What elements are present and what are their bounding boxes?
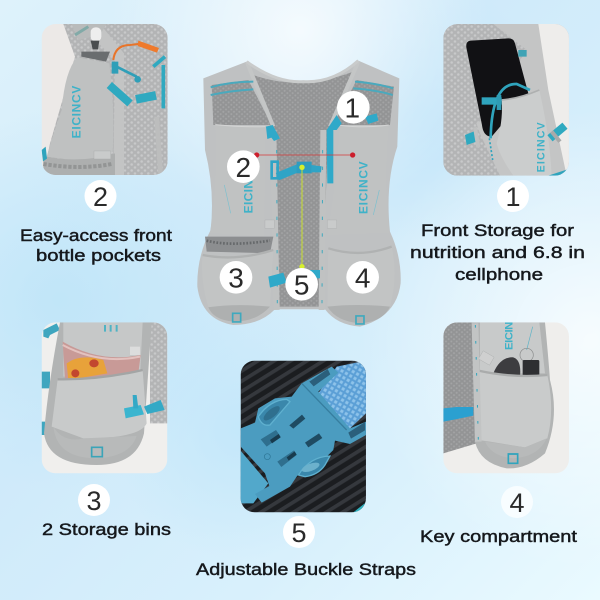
caption: front storage (410, 221, 585, 284)
panel: buckle close-up photo (240, 361, 366, 512)
vest marker 3 (220, 261, 252, 294)
number badge 5: 5 (291, 518, 307, 548)
panel: front storage phone photo: EICINCV (536, 121, 548, 172)
vest marker 3: 3 (228, 263, 244, 294)
buckle (241, 367, 366, 503)
trim columns (273, 130, 323, 310)
caption: 2 storage bins: 2 Storage bins (42, 520, 171, 539)
vest marker 4 (346, 261, 379, 294)
caption: front storage: cellphone (455, 265, 543, 284)
number badge 4: 4 (509, 488, 525, 518)
number badge 1 (497, 180, 529, 212)
main vest diagram (197, 61, 401, 327)
caption: adjustable buckle straps: Adjustable Buckle Straps (196, 560, 416, 579)
bottom left pocket (205, 237, 273, 253)
phone (466, 38, 528, 137)
caption: front storage: Front Storage for (421, 221, 574, 240)
caption: key compartment: Key compartment (420, 527, 577, 546)
panel: storage bins photo (42, 322, 167, 473)
logo text: EICINCV (70, 86, 84, 138)
vest logo right: EICINCV (356, 161, 370, 214)
number badge 4 (501, 486, 533, 518)
panel: front storage phone photo (443, 24, 570, 176)
vest marker 2 (227, 150, 260, 183)
vest logo left: EICIN (242, 180, 256, 213)
vest marker 5 (285, 268, 318, 301)
panel: easy-access bottle pocket photo (42, 24, 168, 175)
number badge 1: 1 (505, 182, 521, 212)
callout: red leader line 2 (254, 152, 355, 158)
caption: easy-access front bottle pockets: bottle pockets (36, 246, 161, 265)
vest marker 2: 2 (236, 152, 251, 183)
number badge 5 (283, 516, 315, 548)
number badge 2: 2 (93, 182, 108, 212)
vest marker 4: 4 (355, 263, 370, 294)
number badge 3: 3 (86, 486, 102, 516)
callout: yellow leader line 5 (299, 165, 305, 269)
number badge 3 (78, 484, 110, 516)
caption: easy-access front bottle pockets: Easy-access front (20, 226, 172, 245)
front bottle pockets (210, 125, 265, 237)
panel: key compartment photo (443, 322, 569, 473)
bottom right pocket (327, 247, 395, 307)
caption: front storage: nutrition and 6.8 in (410, 243, 585, 262)
vest marker 1 (337, 91, 370, 124)
vest body (197, 61, 401, 327)
teal buckles and straps (266, 125, 280, 141)
caption: easy-access front bottle pockets (20, 226, 172, 265)
panel: key compartment photo: EICIN (504, 322, 516, 350)
vest marker 5: 5 (294, 270, 309, 301)
mesh back (253, 72, 353, 307)
number badge 2 (84, 180, 116, 212)
vest marker 1: 1 (345, 93, 360, 124)
